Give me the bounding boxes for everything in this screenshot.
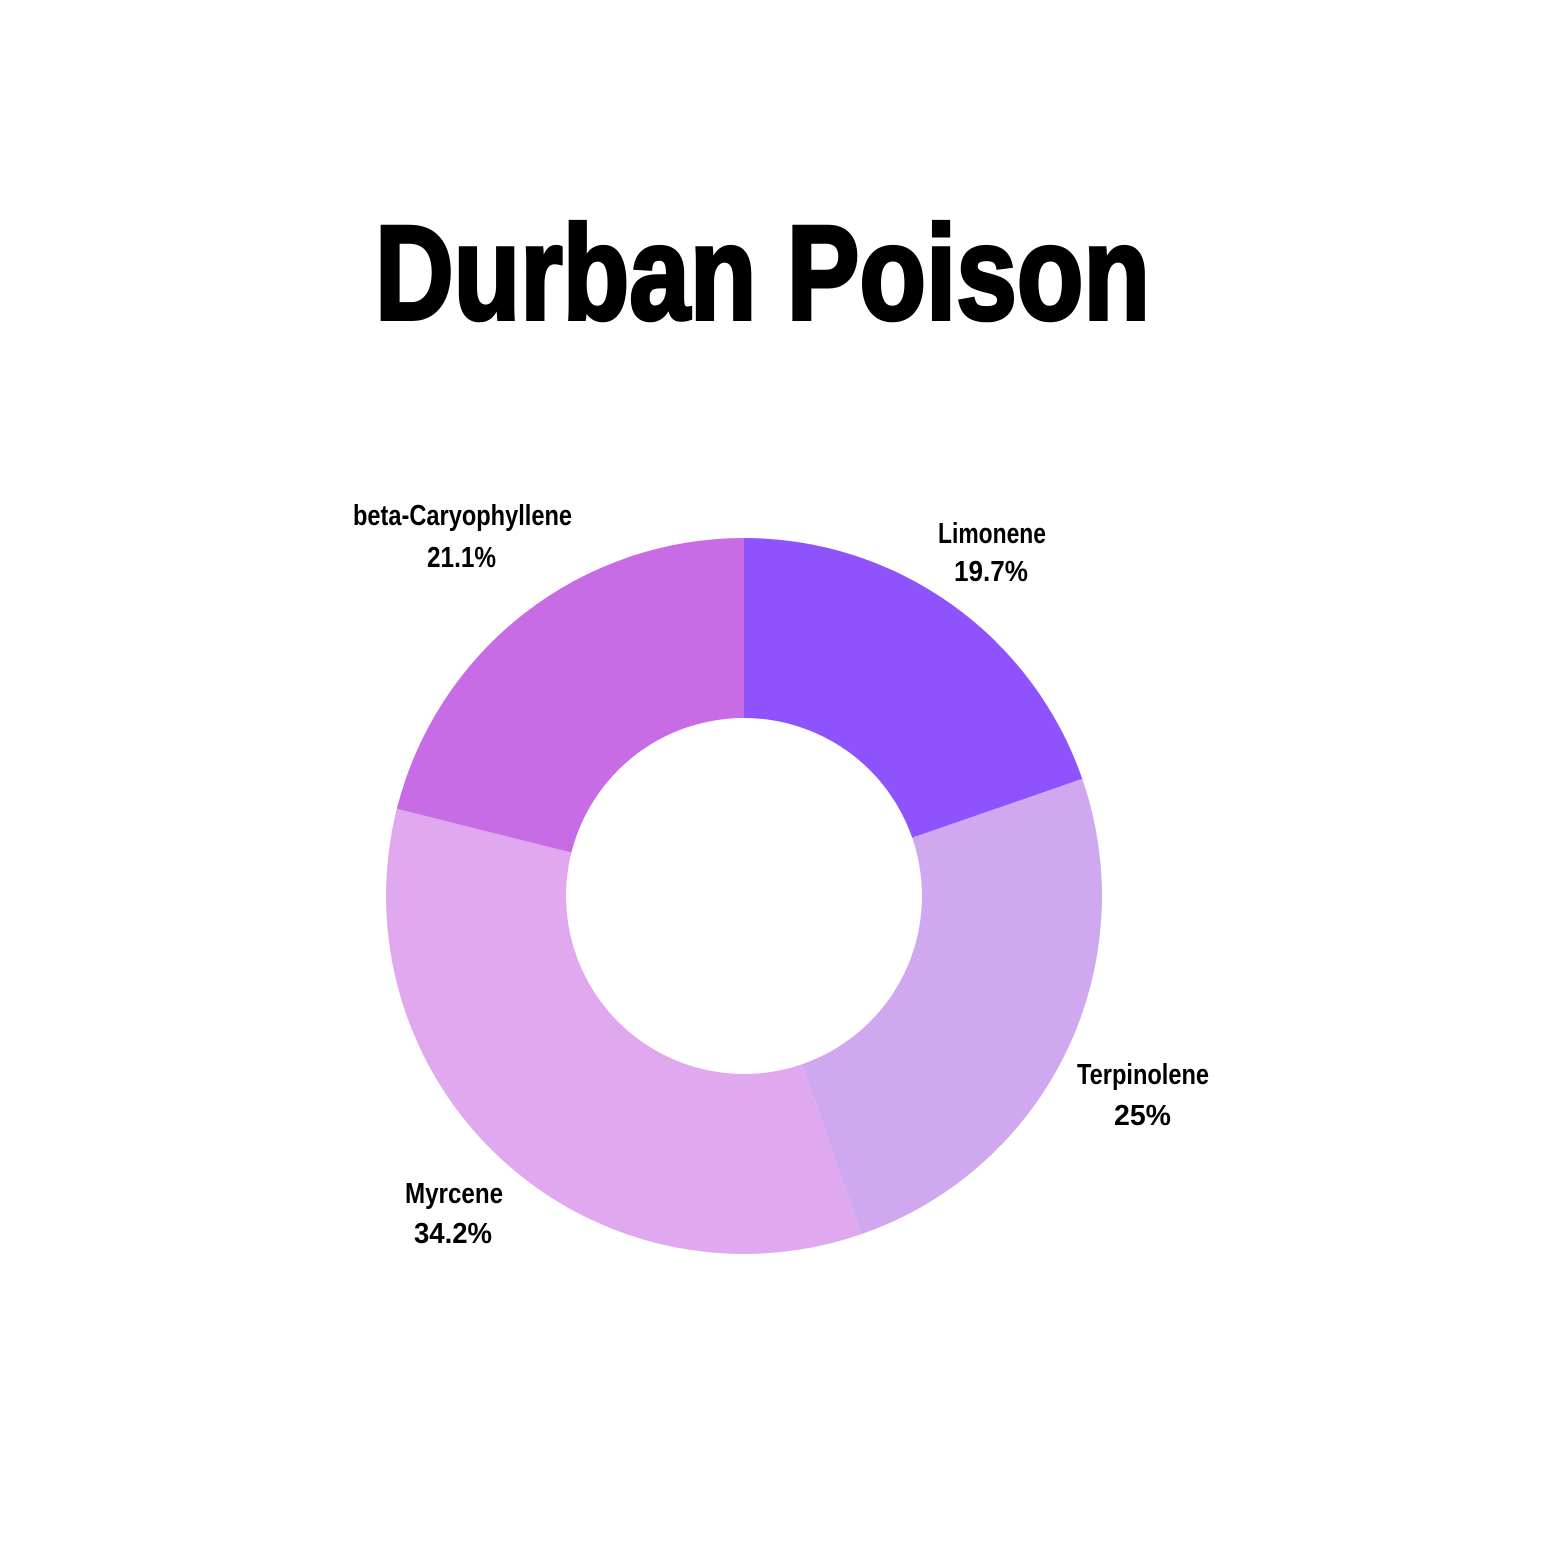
label: Myrcene: Myrcene xyxy=(405,1178,503,1210)
label: beta-Caryophyllene: beta-Caryophyllene xyxy=(353,500,572,532)
slice: Myrcene xyxy=(386,809,861,1254)
label: beta-Caryophyllene xyxy=(353,500,572,574)
label: Limonene: Limonene xyxy=(938,518,1046,550)
label: Myrcene xyxy=(405,1178,503,1250)
label: beta-Caryophyllene: 21.1% xyxy=(427,542,496,574)
label: Limonene xyxy=(938,518,1046,588)
slice: Terpinolene xyxy=(802,779,1102,1234)
label: Terpinolene: Terpinolene xyxy=(1077,1059,1209,1091)
slice: beta-Caryophyllene xyxy=(397,538,744,853)
label: Myrcene: 34.2% xyxy=(414,1218,492,1250)
label: Terpinolene xyxy=(1077,1059,1209,1132)
title: Durban Poison xyxy=(375,199,1150,348)
donut chart xyxy=(386,538,1102,1254)
label: Terpinolene: 25% xyxy=(1114,1100,1171,1132)
label: Limonene: 19.7% xyxy=(954,556,1028,588)
slice: Limonene xyxy=(744,538,1082,838)
